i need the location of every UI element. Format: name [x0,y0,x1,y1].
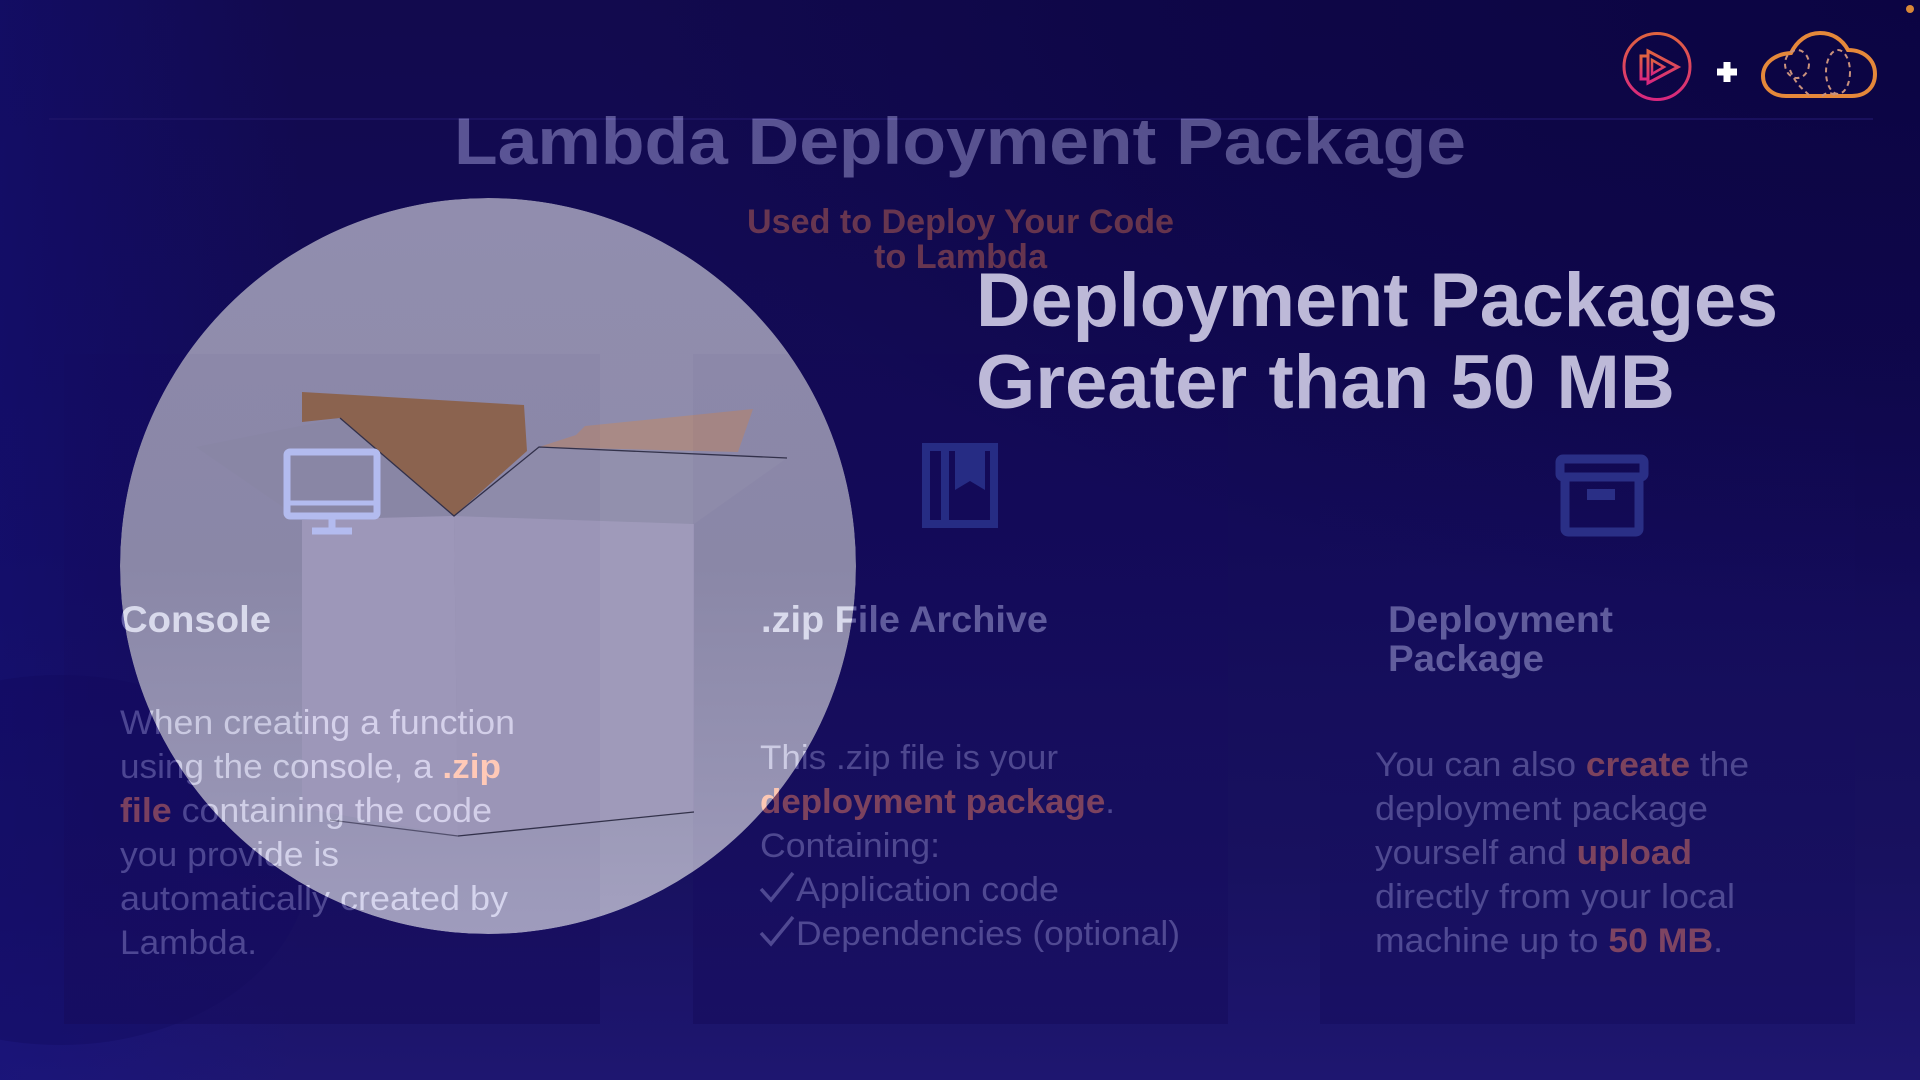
box edges [340,418,787,836]
subtitle: to Lambda [874,238,1048,276]
right flap [454,447,787,524]
title: Lambda Deployment Package [454,104,1466,178]
heading: Deployment Package: Package [1388,638,1544,679]
body text: deployment package [1375,746,1749,960]
left flap [338,418,339,419]
body text: deployment package: directly from your local [1375,878,1735,916]
circular photo: open cardboard box [120,198,856,934]
body text: deployment package: machine up to 50 MB. [1375,922,1723,960]
body text: zip file: Containing: [760,827,940,865]
body text: zip file: Dependencies (optional) [796,915,1180,953]
heading: Deployment Package [1388,599,1613,679]
body text: zip file [760,739,1180,953]
subtitle [747,203,1174,276]
heading: .zip File Archive: .zip File Archive [761,599,1048,640]
column 3: Deployment Package [1375,599,1749,960]
panels: faint overlay columns [64,354,1228,1024]
back flap: brown inside [302,392,527,516]
status dot [1906,5,1914,13]
body text: zip file: This .zip file is your [760,739,1058,777]
icon: bookmark book [926,447,994,524]
back flap: peach inside [539,409,753,452]
headline: Deployment Packages Greater than 50 MB: Deployment Packages [976,258,1778,343]
logo: play icon [1624,34,1690,100]
heading: Console: Console [120,599,271,640]
column 2: .zip File Archive [760,599,1180,953]
body text: console: file containing the code [120,792,492,830]
icon: archive box [1560,459,1644,532]
body text: zip file: deployment package . [760,783,1115,821]
column 1: Console [120,599,515,962]
box front left face [302,516,457,766]
body text: console [120,704,515,962]
body text: console: When creating a function [120,704,515,742]
body text: deployment package: yourself and upload [1375,834,1692,872]
body text: deployment package: deployment package [1375,790,1708,828]
headline: Deployment Packages Greater than 50 MB: Greater than 50 MB [976,340,1675,425]
icon: monitor [287,452,377,531]
check marks [761,873,793,944]
box front right face [454,516,694,732]
logo: AWS cloud [1763,33,1875,96]
body text: console: using the console, a .zip [120,748,501,786]
body text: console: Lambda. [120,924,257,962]
headline: Deployment Packages Greater than 50 MB [976,258,1778,425]
body text: deployment package: You can also create the [1375,746,1749,784]
plus sign [1717,62,1737,82]
subtitle: Used to Deploy Your Code [747,203,1174,241]
heading: Deployment Package: Deployment [1388,599,1613,640]
body text: console: you provide is [120,836,339,874]
body text: zip file: Application code [796,871,1059,909]
body text: console: automatically created by [120,880,508,918]
